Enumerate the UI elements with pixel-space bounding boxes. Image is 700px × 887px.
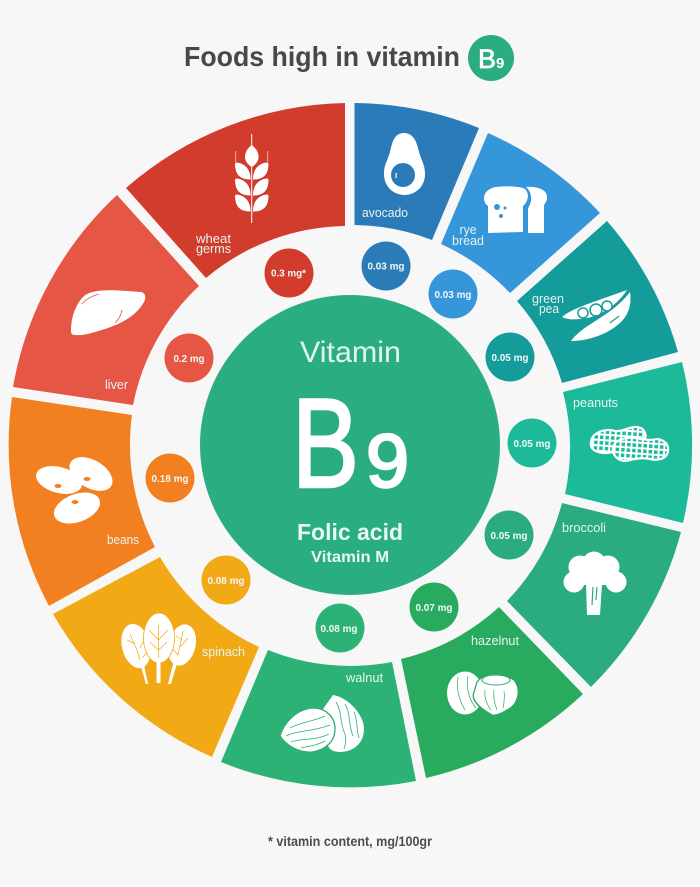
icon: walnut xyxy=(280,695,364,752)
title: Foods high in vitamin xyxy=(184,41,460,72)
panel: spinach xyxy=(53,557,259,757)
value: avocado xyxy=(362,242,410,290)
icon: beans xyxy=(33,450,118,529)
text: Vitamin M: Vitamin M xyxy=(311,549,389,566)
title xyxy=(184,35,514,81)
value: spinach: 0.08 mg xyxy=(208,575,244,587)
value: beans xyxy=(146,454,194,502)
panel: wheat germs: germs xyxy=(196,241,231,256)
value: walnut xyxy=(316,604,364,652)
value: rye bread: 0.03 mg xyxy=(434,289,472,301)
panel: broccoli: broccoli xyxy=(562,520,606,535)
value: broccoli xyxy=(484,510,534,560)
panel: liver xyxy=(13,195,199,405)
heading: B9: 9 xyxy=(366,419,409,503)
heading: B9: B xyxy=(292,372,359,514)
value: avocado: 0.03 mg xyxy=(368,260,404,272)
icon: broccoli xyxy=(564,552,626,615)
value: wheat germs: 0.3 mg* xyxy=(271,268,307,280)
heading: Vitamin: Vitamin xyxy=(300,336,401,369)
icon: rye bread xyxy=(484,186,547,233)
panel: beans xyxy=(9,397,155,606)
panel: wheat germs: wheat xyxy=(195,231,231,246)
value: hazelnut: 0.07 mg xyxy=(416,602,452,614)
value: hazelnut xyxy=(410,582,458,632)
icon: spinach xyxy=(117,613,200,684)
panel: green pea: green xyxy=(532,291,564,306)
text: Folic acid: Folic acid xyxy=(297,519,403,545)
value: peanuts xyxy=(508,418,556,468)
value: beans: 0.18 mg xyxy=(152,473,188,485)
panel: rye bread: bread xyxy=(452,233,484,248)
panel: rye bread: rye xyxy=(460,222,476,237)
panel: peanuts xyxy=(563,362,692,523)
panel: hazelnut: hazelnut xyxy=(471,633,519,648)
value: broccoli: 0.05 mg xyxy=(490,530,528,542)
value: walnut: 0.08 mg xyxy=(320,623,358,635)
panel: hazelnut xyxy=(401,607,583,778)
icon: avocado xyxy=(384,133,425,195)
panel: beans: beans xyxy=(107,532,139,547)
value: green pea: 0.05 mg xyxy=(492,352,528,364)
value: green pea xyxy=(486,332,534,382)
panel: green pea: pea xyxy=(539,301,560,316)
panel: walnut xyxy=(221,650,416,787)
value: rye bread xyxy=(428,270,478,318)
title: 9 xyxy=(496,55,504,72)
panel: peanuts: peanuts xyxy=(573,395,618,410)
footnote: * vitamin content, mg/100gr xyxy=(268,834,433,849)
icon: hazelnut xyxy=(447,672,518,715)
value: wheat germs xyxy=(264,248,314,298)
icon: peanuts xyxy=(591,427,668,461)
panel: avocado: avocado xyxy=(362,205,408,220)
panel: avocado xyxy=(354,103,479,240)
panel: green pea xyxy=(517,221,678,383)
panel: broccoli xyxy=(507,503,681,687)
value: liver: 0.2 mg xyxy=(174,353,204,365)
panel: spinach: spinach xyxy=(202,644,245,659)
panel: rye bread xyxy=(441,133,600,293)
icon: green pea xyxy=(562,290,630,341)
value: spinach xyxy=(202,556,250,604)
value: liver xyxy=(164,334,214,382)
panel: walnut: walnut xyxy=(345,670,383,685)
icon: wheat xyxy=(235,134,268,223)
value: peanuts: 0.05 mg xyxy=(514,438,550,450)
panel: wheat germs xyxy=(126,103,345,278)
center circle: vitamin B9 xyxy=(200,295,500,595)
title: B xyxy=(478,44,496,74)
icon: liver xyxy=(71,290,145,335)
panel: liver: liver xyxy=(105,377,129,392)
